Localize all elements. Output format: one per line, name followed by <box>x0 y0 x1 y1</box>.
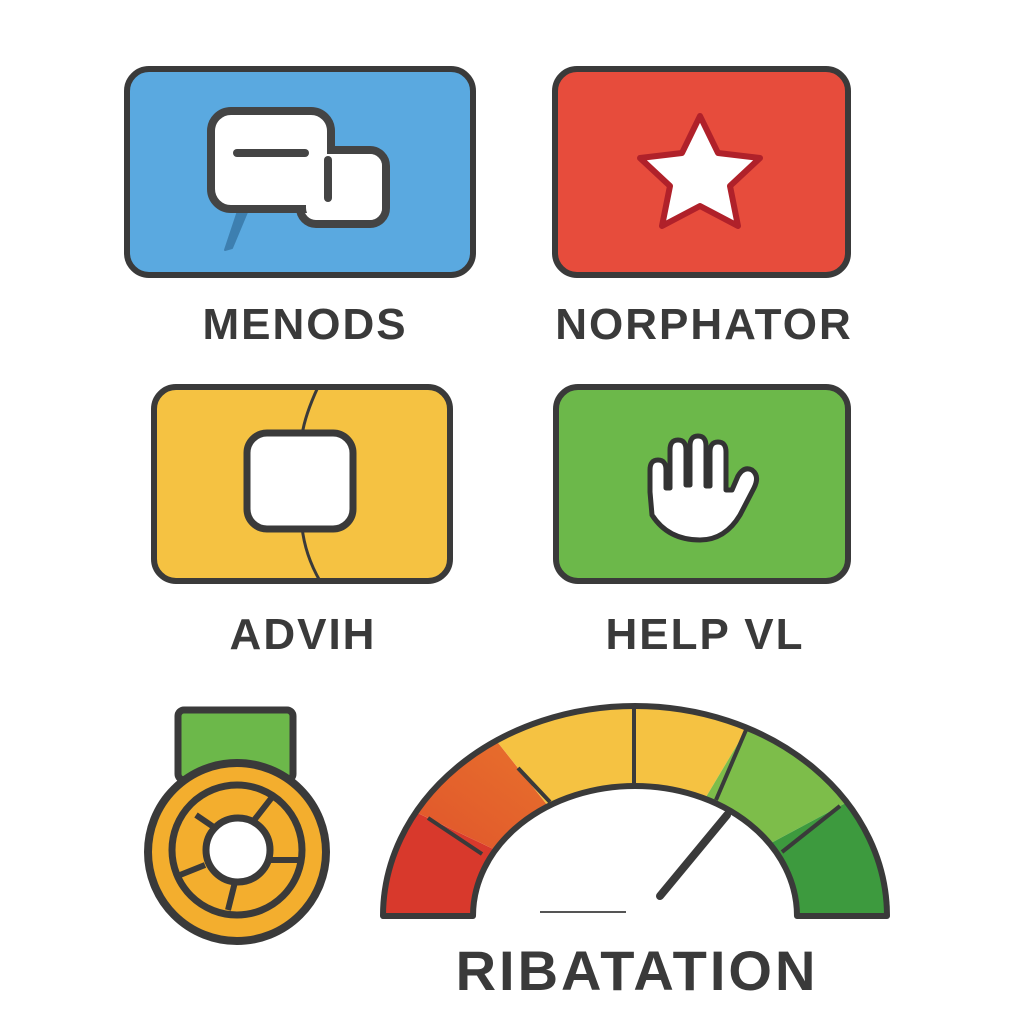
icon: medal <box>148 710 326 941</box>
heading: RIBATATION: RIBATATION <box>456 939 818 1002</box>
heading: MENODS: MENODS <box>202 300 408 349</box>
icon: hand <box>650 436 757 540</box>
panel: yellow card <box>154 387 450 581</box>
panel: green card <box>556 387 848 581</box>
panel: red card <box>555 69 848 275</box>
heading: NORPHATOR: NORPHATOR <box>555 300 853 349</box>
heading: ADVIH: ADVIH <box>230 610 376 659</box>
panel: blue card <box>127 69 473 275</box>
icon: rounded square <box>247 433 353 529</box>
heading: HELP VL: HELP VL <box>605 610 805 659</box>
icon: speech bubbles <box>211 111 386 250</box>
needle <box>660 815 727 896</box>
chart: gauge <box>380 703 890 919</box>
icon: star <box>640 116 760 226</box>
